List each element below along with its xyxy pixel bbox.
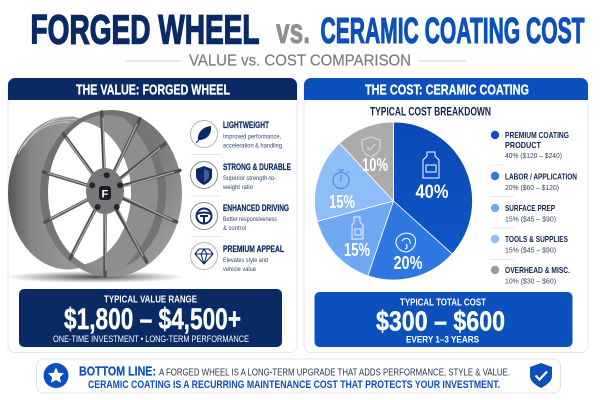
- legend: [490, 130, 577, 286]
- legend item: labor and application: [491, 172, 577, 192]
- value range callout: $1,800 – $4,500+: [64, 303, 241, 336]
- value range callout: ONE-TIME INVESTMENT • LONG-TERM PERFORMANCE: [53, 334, 249, 345]
- title: FORGED WHEEL: [30, 6, 260, 52]
- icon: steering wheel: [190, 202, 218, 230]
- panel: the value, forged wheel: [5, 78, 297, 352]
- pie chart: 15%: [329, 192, 355, 212]
- bottom line banner: CERAMIC COATING IS A RECURRING MAINTENANCE COST THAT PROTECTS YOUR INVESTMENT.: [88, 379, 500, 391]
- bottom line banner: BOTTOM LINE:: [79, 364, 156, 378]
- feature: enhanced driving: & control: [223, 225, 246, 232]
- feature: enhanced driving: Better responsiveness: [223, 216, 277, 223]
- total cost callout: TYPICAL TOTAL COST: [400, 298, 486, 308]
- feature: premium appeal: vehicle value: [223, 266, 256, 273]
- total cost callout: [314, 292, 572, 347]
- icon: shield: [190, 162, 218, 188]
- subtitle: VALUE vs. COST COMPARISON: [189, 53, 411, 70]
- icon: polishing pad: [396, 233, 416, 252]
- feature: premium appeal: PREMIUM APPEAL: [223, 244, 284, 255]
- icon: stopwatch: [333, 170, 349, 188]
- panel header: value: [8, 78, 297, 100]
- legend item: overhead and misc: OVERHEAD & MISC.: [505, 265, 570, 275]
- panel header: value: THE VALUE: FORGED WHEEL: [76, 82, 230, 98]
- legend item: premium coating product: PREMIUM COATING: [505, 130, 569, 140]
- title: [30, 6, 584, 52]
- value range callout: TYPICAL VALUE RANGE: [104, 294, 197, 306]
- feature: premium appeal: Elevates style and: [223, 257, 268, 264]
- total cost callout: $300 – $600: [376, 306, 505, 336]
- pie chart: [315, 122, 473, 280]
- feature: lightweight: [190, 120, 282, 150]
- legend item: tools and supplies: 15% ($45 – $90): [505, 246, 556, 254]
- legend item: labor and application: LABOR / APPLICATION: [505, 172, 577, 182]
- legend item: labor and application: 20% ($60 – $120): [505, 183, 559, 192]
- title: vs.: [276, 12, 310, 51]
- legend item: tools and supplies: TOOLS & SUPPLIES: [505, 234, 568, 244]
- icon: feather: [190, 120, 218, 148]
- icon: check shield: [362, 137, 380, 157]
- icon: spray bottle: [352, 217, 363, 239]
- icon: check shield: [530, 363, 552, 388]
- feature: strong and durable: [190, 162, 291, 191]
- pie chart: 10%: [362, 155, 388, 175]
- forged wheel illustration: [5, 110, 185, 283]
- panel header: cost: [304, 78, 588, 100]
- legend item: surface prep: [491, 203, 556, 224]
- icon: star badge: [44, 363, 68, 388]
- icon: bottle: [423, 152, 439, 178]
- legend item: overhead and misc: 10% ($30 – $60): [505, 276, 556, 286]
- feature: lightweight: LIGHTWEIGHT: [223, 120, 269, 131]
- feature: enhanced driving: ENHANCED DRIVING: [223, 203, 289, 214]
- icon: diamond: [190, 242, 218, 270]
- legend item: tools and supplies: [491, 234, 568, 254]
- feature: strong and durable: Superior strength-to-: [223, 175, 276, 182]
- pie chart: 20%: [394, 253, 422, 273]
- legend item: overhead and misc: [491, 265, 570, 286]
- forged wheel illustration: F: [102, 188, 108, 200]
- legend item: surface prep: SURFACE PREP: [505, 203, 555, 213]
- chart heading: TYPICAL COST BREAKDOWN: [370, 105, 491, 119]
- panel: the cost, ceramic coating: [304, 78, 588, 352]
- value range callout: [19, 289, 282, 347]
- panel header: cost: THE COST: CERAMIC COATING: [365, 82, 529, 98]
- pie chart: 40%: [416, 182, 449, 203]
- feature: lightweight: Improved performance,: [223, 134, 281, 140]
- feature: strong and durable: STRONG & DURABLE: [223, 162, 291, 173]
- legend item: premium coating product: [491, 130, 569, 160]
- total cost callout: EVERY 1–3 YEARS: [406, 334, 479, 346]
- feature: premium appeal: [190, 242, 284, 273]
- feature: enhanced driving: [190, 202, 289, 232]
- feature: lightweight: acceleration & handling: [223, 142, 282, 150]
- legend item: premium coating product: PRODUCT: [505, 140, 542, 150]
- legend item: premium coating product: 40% ($120 – $240): [505, 151, 562, 160]
- legend item: surface prep: 15% ($45 – $90): [505, 214, 556, 224]
- bottom line banner: [36, 359, 560, 393]
- feature: strong and durable: weight ratio: [222, 184, 253, 191]
- pie chart: 15%: [344, 240, 370, 260]
